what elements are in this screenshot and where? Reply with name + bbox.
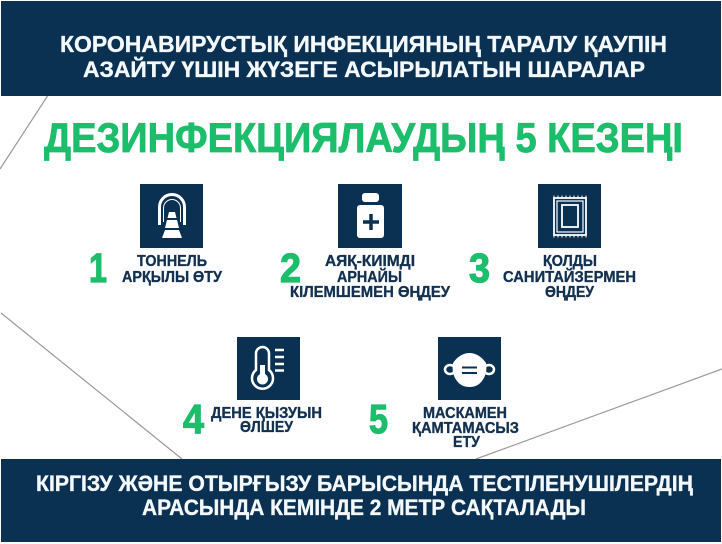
label 2: АРНАЙЫ (337, 268, 402, 286)
label 1: АРҚЫЛЫ ӨТУ (122, 269, 222, 286)
number 2: 2 (280, 245, 301, 291)
label 3 (503, 253, 636, 301)
number 1: 1 (89, 245, 107, 291)
footer text: КІРГІЗУ ЖӘНЕ ОТЫРҒЫЗУ БАРЫСЫНДА ТЕСТІЛЕНУШІЛЕРДІҢ (36, 471, 693, 496)
step 4: temperature (183, 337, 322, 442)
label 3: ҚОЛДЫ (543, 253, 597, 270)
label 5: МАСКАМЕН (423, 405, 507, 422)
icon: bottle with plus (338, 184, 402, 248)
label 5 (412, 405, 519, 451)
header title (60, 31, 667, 82)
label 1 (122, 253, 222, 286)
header title: КОРОНАВИРУСТЫҚ ИНФЕКЦИЯНЫҢ ТАРАЛУ ҚАУПІН (60, 31, 667, 57)
icon: thermometer (237, 337, 300, 400)
label 1: ТОННЕЛЬ (137, 253, 207, 270)
footer text: АРАСЫНДА КЕМІНДЕ 2 МЕТР САҚТАЛАДЫ (142, 495, 586, 520)
label 2: КІЛЕМШЕМЕН ӨҢДЕУ (290, 284, 450, 301)
footer text (36, 471, 693, 520)
label 4: ДЕНЕ ҚЫЗУЫН (211, 405, 322, 422)
icon: mat (538, 184, 601, 248)
label 5: ЕТУ (453, 434, 480, 451)
header title: АЗАЙТУ ҮШІН ЖҮЗЕГЕ АСЫРЫЛАТЫН ШАРАЛАР (83, 57, 645, 82)
step 2: foot mat (280, 184, 450, 301)
number 3: 3 (469, 245, 490, 291)
label 2 (290, 253, 450, 301)
label 3: ӨҢДЕУ (545, 284, 594, 301)
number 4: 4 (183, 396, 204, 442)
label 4 (211, 405, 322, 436)
number 5: 5 (369, 396, 388, 442)
step 5: mask (369, 337, 519, 451)
footer band (1, 459, 721, 542)
label 4: ӨЛШЕУ (240, 419, 293, 436)
icon: face mask (438, 337, 501, 400)
label 5: ҚАМТАМАСЫЗ (412, 420, 519, 437)
step 3: hand sanitizer (469, 184, 636, 301)
icon: tunnel with cone (140, 184, 203, 248)
step 1: tunnel (89, 184, 222, 291)
label 3: САНИТАЙЗЕРМЕН (503, 268, 636, 286)
header band (1, 1, 721, 96)
label 2: АЯҚ-КИІМДІ (325, 253, 415, 270)
